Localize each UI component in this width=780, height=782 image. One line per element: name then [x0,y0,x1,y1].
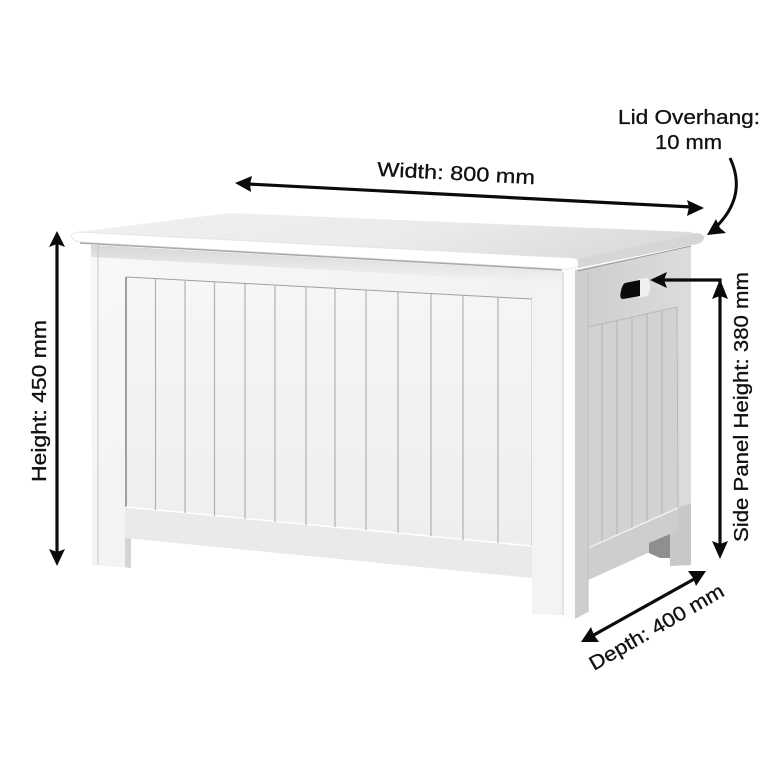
arrow: side panel height [650,272,728,559]
front right leg [532,270,575,619]
arrow: depth [581,571,706,642]
arrow: lid overhang [707,158,736,235]
label: height: Height: 450 mm [29,320,51,482]
arrow: width [235,176,704,216]
storage chest illustration [72,213,704,619]
side handle cut-out [620,278,650,299]
label: depth: Depth: 400 mm [586,580,728,675]
shadow beneath lid [91,245,563,283]
front panel grooves [156,279,498,543]
arrow: height [49,231,65,566]
label: lid overhang [618,107,760,154]
label: lid overhang: Lid Overhang: [618,107,760,129]
chest lid [72,213,704,271]
chest side face [575,246,691,619]
chest front face [91,245,563,615]
label: side panel height: Side Panel Height: 380 mm [731,272,753,542]
label: width: Width: 800 mm [377,159,536,189]
label: lid overhang: 10 mm [655,132,722,154]
